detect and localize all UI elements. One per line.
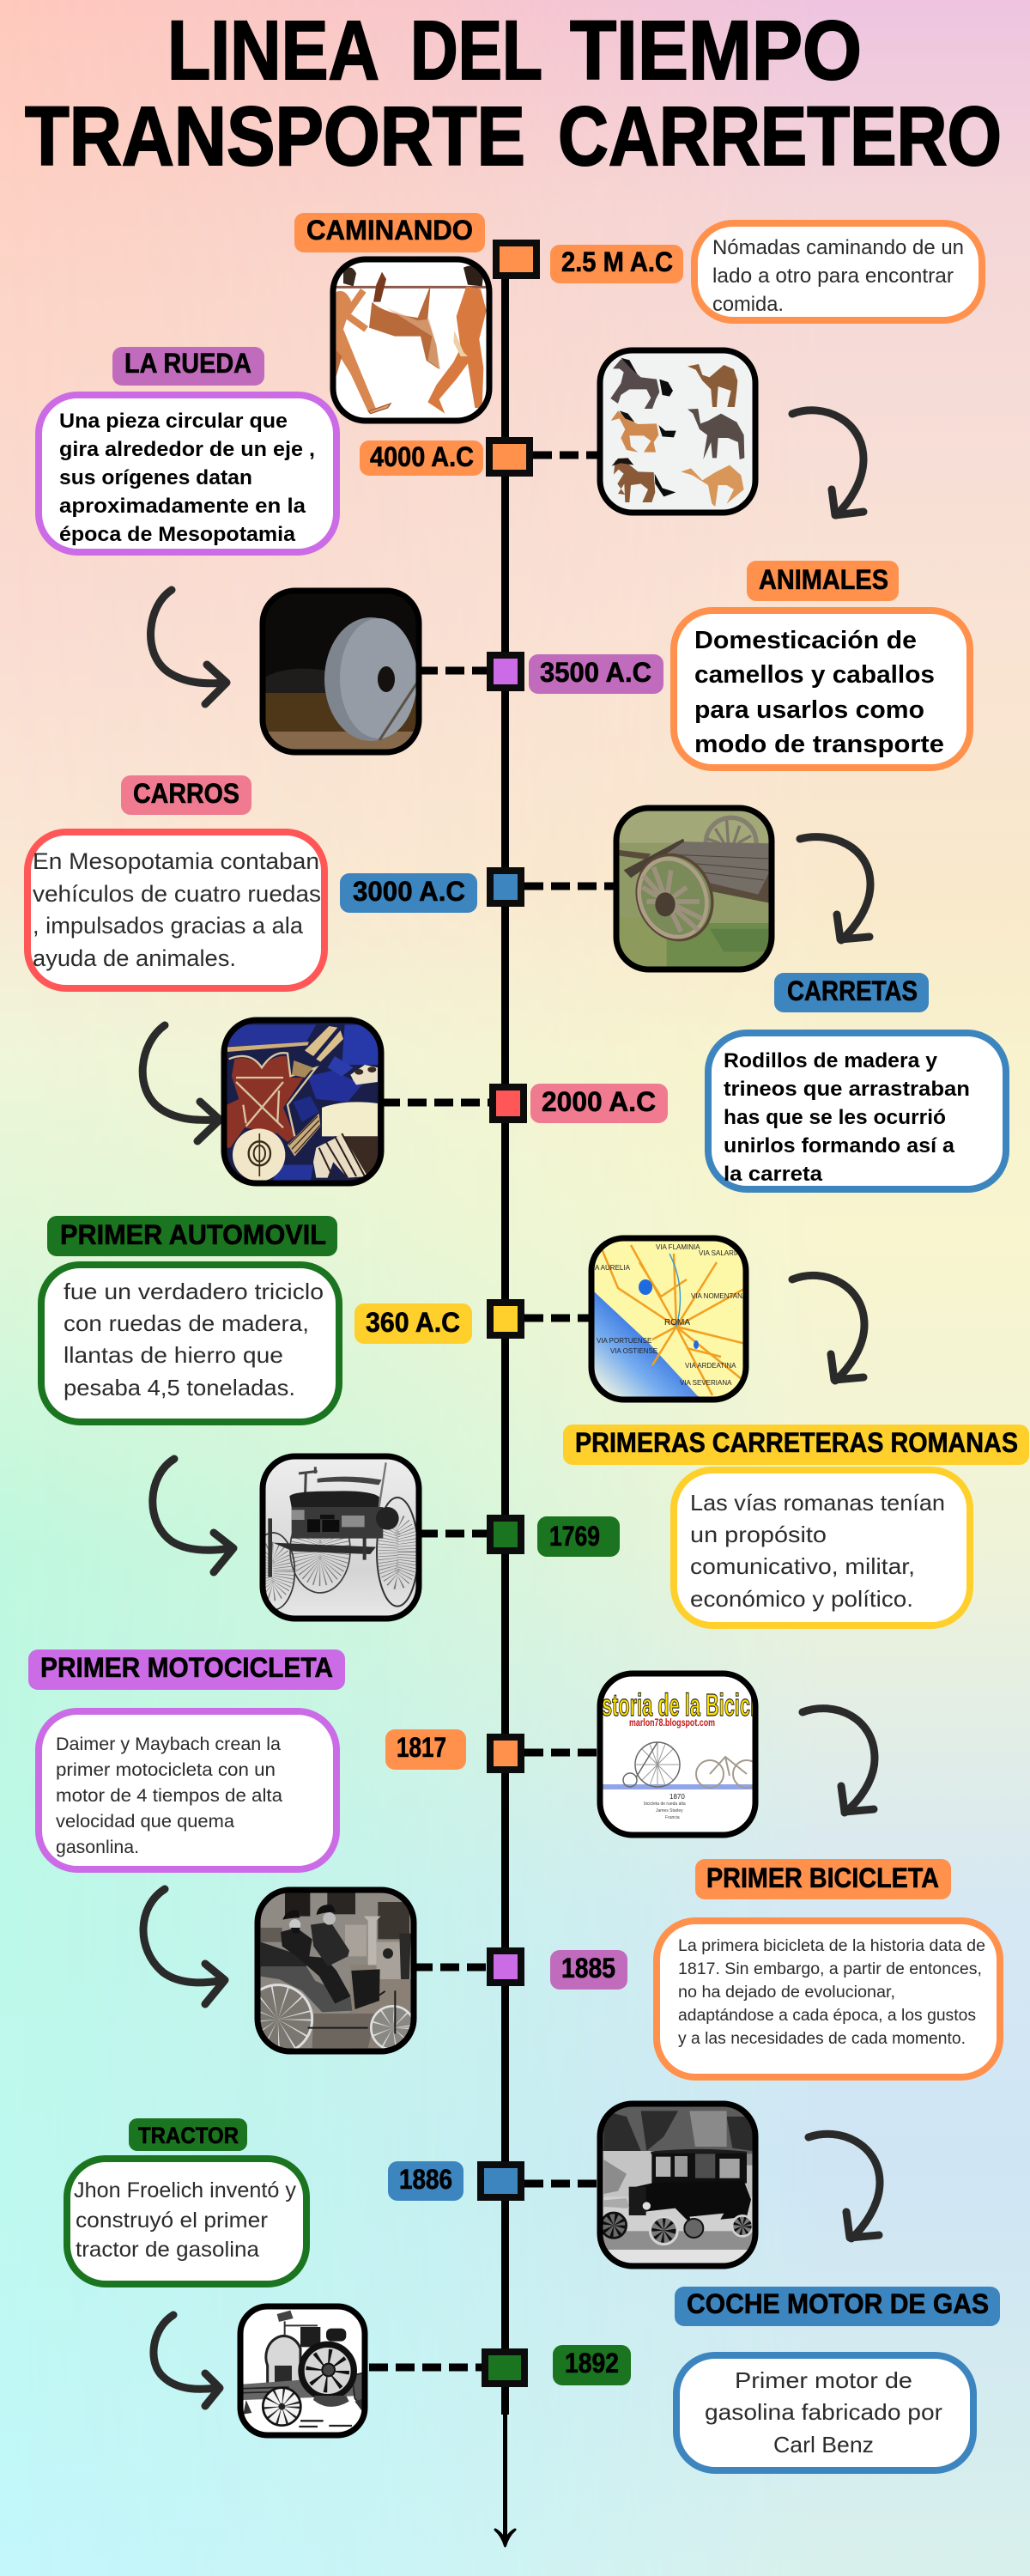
connector	[533, 452, 601, 459]
marker: 1886	[481, 2165, 521, 2197]
text box: mesopotamia	[27, 832, 324, 988]
title: TRANSPORTE	[25, 89, 525, 183]
text box: domesticacion: para usarlos como	[694, 696, 924, 724]
text box: triciclo	[41, 1265, 339, 1422]
arrow: curved down	[792, 1275, 864, 1381]
marker: 3500 A.C	[490, 655, 521, 688]
heading: animales	[747, 561, 899, 601]
image: hunters carrying animal	[333, 259, 489, 421]
text box: mesopotamia: vehículos de cuatro ruedas	[33, 881, 321, 907]
text box: froelich	[67, 2159, 306, 2284]
text box: rueda	[39, 395, 336, 552]
event: carretas	[340, 808, 1006, 1189]
event: carros	[27, 775, 668, 1183]
text box: carretas: unirlos formando así a	[724, 1134, 955, 1157]
heading: caminando: CAMINANDO	[306, 215, 473, 246]
text box: carl benz: Primer motor de	[735, 2367, 912, 2393]
text box: rueda: gira alrededor de un eje ,	[59, 438, 315, 461]
heading: primer automovil: PRIMER AUTOMOVIL	[60, 1219, 326, 1250]
text box: vias romanas: comunicativo, militar,	[690, 1553, 915, 1579]
text box: nomadas: lado a otro para encontrar	[712, 264, 954, 288]
date: 3000 A.C	[340, 873, 477, 913]
date: 2000 A.C: 2000 A.C	[542, 1086, 656, 1117]
connector	[414, 1963, 487, 1971]
arrow: curved right	[151, 590, 227, 704]
image: bicycle history chart: James Starley	[656, 1808, 683, 1814]
image: stone wheel	[263, 591, 419, 752]
text box: triciclo: con ruedas de madera,	[64, 1310, 309, 1336]
image: Daimler motor carriage	[244, 1890, 415, 2054]
text box: nomadas: comida.	[712, 293, 784, 316]
text box: carl benz: gasolina fabricado por	[705, 2399, 942, 2425]
arrow: curved down	[803, 1709, 875, 1813]
image: chariot mosaic	[224, 1020, 381, 1183]
image: wooden cart	[616, 808, 772, 969]
text box: daimer: primer motocicleta con un	[56, 1760, 276, 1780]
date: 1885: 1885	[561, 1953, 615, 1984]
text box: carretas	[708, 1033, 1006, 1189]
event: coche motor de gas	[388, 2104, 1000, 2470]
date: 3500 A.C	[529, 654, 663, 694]
image: map of Roman roads	[591, 1238, 748, 1400]
text box: bicicleta: y a las necesidades de cada momento.	[678, 2030, 966, 2048]
date: 1817: 1817	[397, 1732, 446, 1763]
text box: froelich: tractor de gasolina	[76, 2238, 259, 2262]
text box: bicicleta	[657, 1921, 1000, 2077]
image: map of Roman roads: VIA SEVERIANA	[680, 1379, 732, 1387]
image: steam tractor engraving	[240, 2306, 365, 2435]
text box: vias romanas: económico y político.	[690, 1586, 913, 1612]
heading: carretas: CARRETAS	[787, 975, 918, 1006]
text box: carretas: has que se les ocurrió	[724, 1106, 946, 1129]
text box: domesticacion: modo de transporte	[694, 731, 944, 758]
text box: vias romanas: un propósito	[690, 1522, 827, 1547]
text box: vias romanas: Las vías romanas tenían	[690, 1490, 945, 1516]
text box: domesticacion: camellos y caballos	[694, 661, 935, 689]
date: 1817	[385, 1729, 466, 1770]
marker: 2.5 M A.C	[496, 243, 536, 276]
marker: 1885	[490, 1951, 521, 1983]
image: bicycle history chart: bicicleta de rueda alta	[644, 1801, 686, 1807]
date: 1885	[550, 1950, 627, 1990]
date: 1892: 1892	[565, 2348, 619, 2379]
text box: bicicleta: 1817. Sin embargo, a partir de entonces,	[678, 1960, 982, 1978]
title: DEL	[410, 3, 542, 97]
connector	[524, 1748, 600, 1757]
text box: daimer	[39, 1711, 336, 1869]
text box: daimer: velocidad que quema	[56, 1812, 234, 1832]
connector	[369, 2363, 482, 2372]
marker: 2000 A.C	[493, 1087, 524, 1120]
text box: triciclo: pesaba 4,5 toneladas.	[64, 1375, 295, 1400]
marker: 1769	[490, 1518, 521, 1551]
connector	[524, 1314, 591, 1322]
text box: bicicleta: adaptándose a cada época, a los gustos	[678, 2007, 976, 2025]
text box: mesopotamia: En Mesopotamia contaban	[33, 848, 319, 874]
text box: rueda: aproximadamente en la	[59, 495, 306, 518]
connector	[524, 2179, 600, 2188]
marker: 3000 A.C	[490, 871, 521, 903]
connector	[381, 1099, 489, 1106]
date: 3500 A.C: 3500 A.C	[540, 657, 651, 688]
image: map of Roman roads: VIA FLAMINIA	[656, 1243, 700, 1251]
event: primer automovil	[41, 1216, 620, 1619]
arrow: curved down	[800, 837, 870, 940]
date: 2.5 M A.C: 2.5 M A.C	[561, 246, 673, 277]
title: LINEA	[167, 3, 379, 97]
text box: vias romanas	[674, 1470, 970, 1625]
text box: froelich: construyó el primer	[76, 2208, 268, 2233]
arrow: curved down	[809, 2134, 880, 2239]
connector	[524, 883, 616, 890]
image: map of Roman roads: ROMA	[664, 1318, 690, 1327]
heading: la rueda: LA RUEDA	[124, 348, 251, 379]
text box: bicicleta: no ha dejado de evolucionar,	[678, 1984, 895, 2002]
marker: 1817	[490, 1737, 521, 1770]
date: 360 A.C: 360 A.C	[366, 1307, 460, 1338]
date: 1769: 1769	[549, 1521, 600, 1552]
marker: 1892	[485, 2352, 524, 2384]
event: primer bicicleta	[385, 1674, 1000, 2077]
text box: domesticacion	[674, 611, 970, 768]
text box: daimer: gasonlina.	[56, 1838, 139, 1857]
arrow: curved right	[142, 1025, 220, 1141]
event: primer motocicleta	[28, 1649, 627, 2054]
date: 2000 A.C	[530, 1084, 668, 1123]
marker: 4000 A.C	[489, 440, 530, 473]
image: bicycle history chart: Francia	[665, 1815, 680, 1820]
heading: primer bicicleta: PRIMER BICICLETA	[706, 1862, 939, 1893]
image: bicycle history chart: storia de la Bicicl	[602, 1687, 755, 1722]
text box: daimer: Daimer y Maybach crean la	[56, 1735, 281, 1754]
text box: rueda: sus orígenes datan	[59, 466, 252, 489]
text box: mesopotamia: ayuda de animales.	[33, 945, 236, 971]
image: Benz three-wheeler	[251, 1456, 419, 1619]
date: 4000 A.C: 4000 A.C	[370, 441, 474, 472]
event: la rueda	[39, 347, 663, 752]
text box: triciclo: llantas de hierro que	[64, 1342, 283, 1368]
text box: carretas: la carreta	[724, 1163, 823, 1186]
date: 1886: 1886	[399, 2164, 452, 2195]
heading: coche motor de gas: COCHE MOTOR DE GAS	[687, 2288, 989, 2319]
date: 1892	[553, 2345, 631, 2385]
heading: carros: CARROS	[133, 778, 239, 809]
date: 1769	[537, 1516, 620, 1557]
date: 3000 A.C: 3000 A.C	[353, 876, 465, 907]
image: map of Roman roads: VIA PORTUENSE	[597, 1337, 651, 1345]
text box: carretas: Rodillos de madera y	[724, 1049, 938, 1072]
event: tractor	[67, 2118, 631, 2435]
image: vintage black car	[599, 2104, 757, 2266]
arrow: curved right	[154, 2315, 220, 2406]
event: animales	[360, 350, 970, 768]
title	[25, 3, 1002, 183]
image: bicycle history chart: 1870	[670, 1793, 685, 1801]
image: bicycle history chart	[600, 1674, 760, 1835]
text box: carl benz: Carl Benz	[773, 2432, 874, 2458]
text box: nomadas: Nómadas caminando de un	[712, 236, 964, 259]
arrow: curved down	[792, 410, 863, 515]
date: 360 A.C	[354, 1303, 472, 1344]
heading: animales: ANIMALES	[759, 564, 888, 595]
image: map of Roman roads: A AURELIA	[595, 1264, 631, 1272]
text box: rueda: Una pieza circular que	[59, 410, 288, 433]
text box: froelich: Jhon Froelich inventó y	[74, 2178, 296, 2202]
text box: mesopotamia: , impulsados gracias a ala	[33, 913, 304, 939]
title: TIEMPO	[570, 3, 862, 97]
text box: rueda: época de Mesopotamia	[59, 523, 296, 546]
image: map of Roman roads: VIA ARDEATINA	[685, 1362, 736, 1370]
heading: tractor: TRACTOR	[138, 2123, 239, 2148]
image: map of Roman roads: VIA OSTIENSE	[610, 1347, 657, 1355]
image: horses and camels	[600, 350, 755, 513]
connector	[419, 1530, 487, 1537]
arrow: curved right	[143, 1889, 225, 2004]
text box: carretas: trineos que arrastraban	[724, 1078, 970, 1101]
text box: bicicleta: La primera bicicleta de la historia data de	[678, 1937, 985, 1955]
event: caminando	[294, 213, 982, 421]
text box: carl benz	[676, 2355, 973, 2470]
event: carreteras romanas	[354, 1238, 1029, 1625]
connector	[419, 666, 487, 675]
marker: 360 A.C	[490, 1303, 521, 1335]
text box: domesticacion: Domesticación de	[694, 627, 917, 654]
text box: triciclo: fue un verdadero triciclo	[64, 1279, 324, 1304]
heading: primer motocicleta: PRIMER MOTOCICLETA	[40, 1652, 333, 1683]
image: map of Roman roads: VIA NOMENTANA	[691, 1292, 748, 1300]
timeline axis with arrow	[495, 279, 515, 2546]
image: map of Roman roads: VIA SALARIA	[699, 1249, 741, 1257]
text box: daimer: motor de 4 tiempos de alta	[56, 1786, 282, 1806]
date: 1886	[388, 2161, 464, 2201]
heading: carretas	[774, 973, 929, 1012]
text box: nomadas	[694, 223, 982, 320]
image: bicycle history chart: marlon78.blogspot.com	[629, 1716, 715, 1728]
arrow: curved right	[153, 1459, 233, 1572]
